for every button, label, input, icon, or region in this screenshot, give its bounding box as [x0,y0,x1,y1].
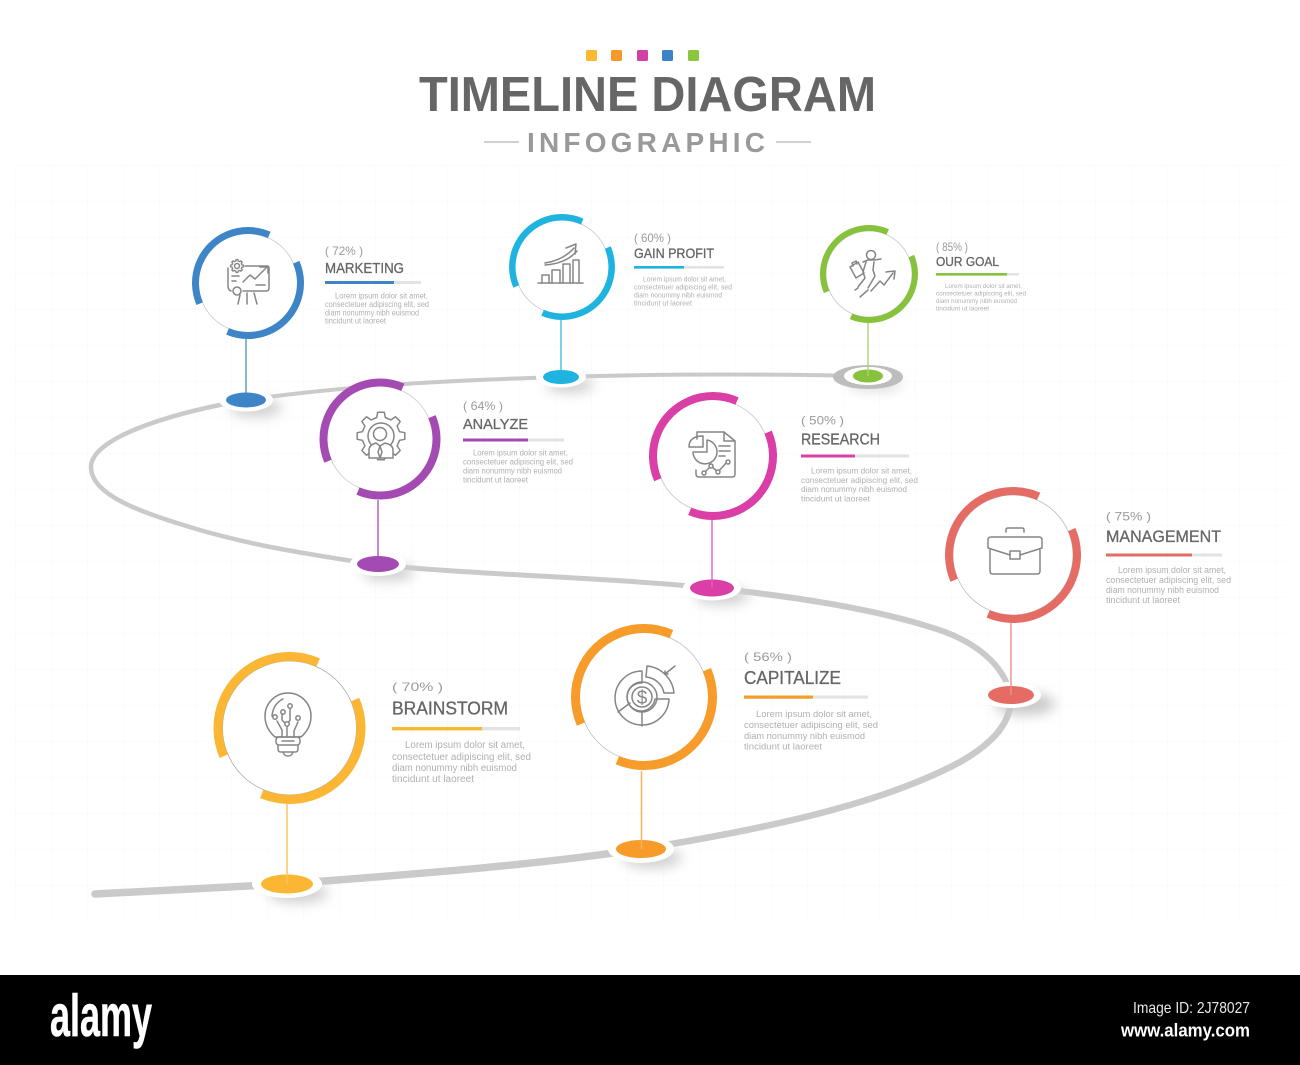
ring [179,214,317,352]
text: capitalize: diam nonummy nibh euismod [744,731,865,742]
text: analyze [463,399,573,484]
ring [306,365,454,513]
pin [981,623,1055,715]
text: capitalize: Lorem ipsum dolor sit amet, [756,709,872,720]
milestone: research [634,377,918,605]
text: gain profit: consectetuer adipiscing elit, sed [634,282,732,292]
text: analyze: Lorem ipsum dolor sit amet, [473,448,568,458]
pin [350,500,414,581]
milestone: analyze [306,365,573,581]
text: management: tincidunt ut laoreet [1106,595,1181,605]
winding road [91,375,1011,894]
icon: briefcase [988,528,1042,574]
icon: dollar target chart [615,666,675,726]
subheading: INFOGRAPHIC [527,127,765,158]
text: gain profit: Lorem ipsum dolor sit amet, [643,274,726,284]
text: brainstorm: diam nonummy nibh euismod [392,763,517,774]
text: marketing [325,244,429,326]
text: marketing: MARKETING [325,261,404,277]
text: capitalize: consectetuer adipiscing elit, sed [744,720,878,731]
text: marketing: consectetuer adipiscing elit, sed [325,300,429,309]
pin [536,320,594,393]
text: brainstorm: tincidunt ut laoreet [392,774,474,785]
icon: growth chart [538,244,583,283]
text: gain profit [634,231,732,308]
ring [196,634,383,822]
text: capitalize [744,650,878,752]
colour squares [586,50,699,61]
text: research [801,414,918,504]
milestone: capitalize [554,607,878,868]
heading: TIMELINE DIAGRAM [419,68,876,122]
text: marketing: Lorem ipsum dolor sit amet, [335,292,428,300]
text: research: Lorem ipsum dolor sit amet, [811,466,912,476]
text: brainstorm [392,680,531,785]
milestone: management [929,471,1231,715]
milestone: marketing [179,214,429,417]
pin [608,771,682,868]
ring [929,471,1097,639]
text: management [1106,510,1231,605]
icon: light bulb [265,693,311,756]
text: our goal [936,240,1026,312]
text: brainstorm: BRAINSTORM [392,698,508,718]
watermark logo: alamy [50,983,152,1049]
text: management: MANAGEMENT [1106,527,1221,546]
text: analyze: tincidunt ut laoreet [463,476,529,484]
text: marketing: tincidunt ut laoreet [325,316,387,326]
text: marketing: diam nonummy nibh euismod [325,308,419,318]
text: analyze: ANALYZE [463,416,528,433]
pin [219,338,282,417]
text: research: tincidunt ut laoreet [801,494,871,504]
text: management: ( 75% ) [1106,510,1151,524]
website: www.alamy.com [1120,1020,1250,1040]
ring [809,214,929,334]
image id: Image ID: 2J78027 [1133,1000,1250,1017]
text: analyze: ( 64% ) [463,399,503,413]
ring [554,607,734,787]
ring [497,202,627,332]
milestone: our goal [809,214,1026,391]
text: our goal: OUR GOAL [936,255,999,269]
text: our goal: tincidunt ut laoreet [936,306,989,312]
pin [683,520,749,605]
pin [252,804,328,903]
text: gain profit: diam nonummy nibh euismod [634,290,722,300]
text: analyze: consectetuer adipiscing elit, sed [463,458,573,466]
text: our goal: diam nonummy nibh euismod [936,298,1017,305]
text: research: ( 50% ) [801,414,844,428]
icon: report with pie chart [689,432,735,477]
text: management: consectetuer adipiscing elit, sed [1106,575,1231,585]
icon: presentation board [228,260,269,304]
icon: gear and person [357,412,405,460]
icon: dollar target chart: $ [637,688,648,709]
icon: running businessman [850,250,895,297]
text: capitalize: ( 56% ) [744,650,792,664]
text: management: Lorem ipsum dolor sit amet, [1118,565,1226,575]
text: gain profit: GAIN PROFIT [634,246,714,261]
text: marketing: ( 72% ) [325,244,363,258]
watermark footer bar [0,975,1300,1065]
pin: final target [833,322,903,391]
text: research: consectetuer adipiscing elit, sed [801,475,918,485]
text: gain profit: ( 60% ) [634,231,671,245]
text: our goal: consectetuer adipiscing elit, sed [936,290,1026,298]
ring [634,377,792,535]
text: analyze: diam nonummy nibh euismod [463,466,562,476]
text: management: diam nonummy nibh euismod [1106,585,1219,595]
text: our goal: ( 85% ) [936,240,968,254]
title block [419,50,876,158]
milestone: brainstorm [196,634,531,903]
text: gain profit: tincidunt ut laoreet [634,298,692,308]
text: research: diam nonummy nibh euismod [801,484,907,494]
text: capitalize: tincidunt ut laoreet [744,742,822,752]
milestone: gain profit [497,202,732,393]
text: research: RESEARCH [801,432,880,448]
text: capitalize: CAPITALIZE [744,668,841,688]
text: brainstorm: consectetuer adipiscing elit, sed [392,752,531,763]
text: brainstorm: Lorem ipsum dolor sit amet, [405,740,525,751]
text: our goal: Lorem ipsum dolor sit amet, [945,283,1022,290]
text: brainstorm: ( 70% ) [392,680,443,694]
